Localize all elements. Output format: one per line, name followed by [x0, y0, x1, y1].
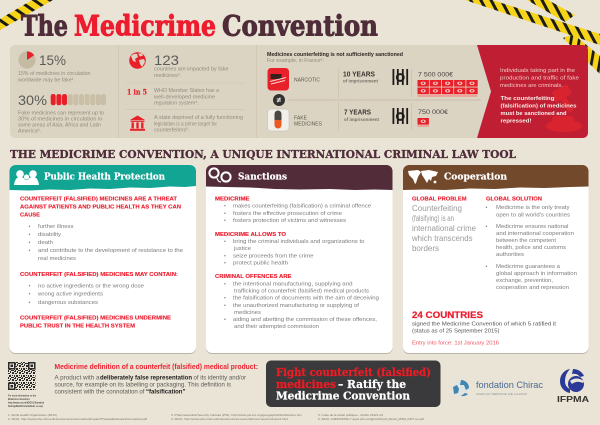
text: threats: AGAINST PATIENTS AND PUBLIC HEALTH AS THEY CAN: [20, 204, 181, 210]
stat: 123 countries: 123: [154, 52, 179, 68]
text: 24 countries: [412, 310, 557, 346]
text: public trust: PUBLIC TRUST IN THE HEALTH SYSTEM: [20, 324, 135, 330]
icon: fake medicine capsule: [268, 109, 289, 131]
text: medicrime: fosters protection of victims and witnesses: [233, 218, 346, 224]
stat: 123 countries: medicines³.: [154, 73, 181, 79]
panel: criminals call-out: production and traffic of fake: [500, 76, 579, 82]
sanctions comparison: FAKE: [294, 116, 308, 122]
title: [21, 10, 378, 42]
icon: family: [14, 170, 39, 185]
text: public trust: COUNTERFEIT (FALSIFIED) MEDICINES UNDERMINE: [20, 316, 171, 322]
text: 24 countries: 24 COUNTRIES: [412, 310, 483, 320]
text: criminal offences: •: [224, 296, 226, 302]
icon: caution tape top left: [0, 0, 53, 30]
panel: sanctions: [206, 165, 392, 354]
panel: public health protection: [10, 165, 196, 354]
icon: gavel watermark: [546, 84, 582, 132]
stat: state deprived: legislation is a prime target for: [154, 122, 217, 128]
sanctions comparison: Medicines counterfeiting is not sufficiently sanctioned: [267, 52, 403, 58]
fake medicine sentence: [344, 108, 380, 122]
stat: 1 in 5: WHO Member States has a: [154, 88, 219, 94]
text: threats: and contribute to the development of resistance to the: [38, 248, 183, 254]
call to action box: [266, 360, 440, 407]
panel: criminals call-out: [477, 45, 588, 138]
narcotic fine: 7 500 000€: [418, 72, 453, 78]
stat: 30 percent: [18, 92, 106, 134]
text: criminal offences: aiding and abetting the commission of these offences,: [233, 317, 378, 323]
text: medicrime allows to: •: [224, 254, 226, 260]
text: global problem: (falsifying) is an: [412, 214, 454, 223]
text: global solution: and international cooperation: [496, 231, 574, 237]
stat: 15 percent: 15% of medicines in circulation: [18, 71, 91, 77]
stat: 1 in 5: well-developed medicine: [154, 94, 215, 100]
text: medicrime allows to: bring the criminal individuals and organizations to: [233, 239, 364, 245]
text: 24 countries: (status as of 25 September 2015): [412, 328, 500, 334]
header: sanctions: [206, 165, 392, 190]
stat: 15 percent: 15%: [39, 52, 66, 68]
text: global solution: Medicrime ensures national: [496, 224, 568, 230]
text: criminal offences: •: [224, 317, 226, 323]
text: 24 countries: Entry into force: 1st January 2016: [412, 340, 499, 346]
text: contents: •: [28, 284, 30, 290]
text: threats: real medicines: [38, 256, 76, 262]
text: medicrime allows to: protect public health: [233, 260, 288, 266]
stat: 30 percent: some areas of Asia, Africa and Latin: [18, 122, 101, 128]
text: global solution: Medicrime is the only treaty: [496, 205, 570, 211]
narcotic sentence: of imprisonment: [343, 78, 379, 84]
fake medicine fine: [418, 109, 448, 127]
text: global solution: •: [486, 264, 488, 270]
panel: criminals call-out: (falsification) of medicines: [500, 104, 576, 110]
text: global solution: Medicrime guarantees a: [496, 264, 560, 270]
panel: cooperation: [403, 165, 588, 354]
text: definition: “falsification”: [146, 390, 186, 396]
text: contents: [20, 272, 178, 306]
text: medicrime: •: [224, 204, 226, 210]
text: criminal offences: the unauthorized manufacturing or supplying of: [233, 303, 360, 309]
text: definition: deliberately false representation: [100, 376, 192, 382]
header: cooperation: [403, 165, 588, 190]
text: medicrime: •: [224, 218, 226, 224]
text: global solution: global approach in information: [496, 271, 577, 277]
stat: 15 percent: worldwide may be fake¹.: [18, 78, 75, 84]
text: medicrime allows to: •: [224, 239, 226, 245]
panel: key figures: [10, 45, 588, 138]
text: global solution: exchange, prevention,: [496, 278, 554, 284]
header: cooperation: Cooperation: [444, 172, 507, 182]
narcotic sentence: 10 YEARS: [343, 70, 375, 78]
text: threats: •: [28, 248, 30, 254]
sanctions comparison: [267, 52, 481, 131]
stat: 30 percent: 30% of medicines in circulation in: [18, 116, 103, 122]
text: QR caption: For more information on the: [8, 394, 36, 398]
text: global problem: [411, 196, 476, 253]
sanctions comparison: For example, in France⁶:: [267, 58, 324, 64]
text: global solution: GLOBAL SOLUTION: [486, 196, 542, 202]
text: contents: dangerous substances: [38, 300, 98, 306]
footnotes: 3. Pharmaceutical Security Institute (PSI): http://www.psi-inc.org/geographicDistributions.cfm: [171, 413, 303, 417]
stat: 15 percent: [18, 51, 91, 84]
icon: caution tape top right: [465, 0, 600, 74]
logo: IFPMA: [557, 369, 589, 404]
text: global solution: authorities: [496, 252, 524, 258]
text: QR caption: [8, 394, 44, 408]
text: contents: •: [28, 292, 30, 298]
text: criminal offences: CRIMINAL OFFENCES ARE: [215, 274, 292, 280]
icon: pie chart: [18, 51, 36, 69]
icon: narcotic: [268, 68, 289, 90]
icon: QR code: [8, 362, 36, 390]
icon: prison bars narcotic: [392, 69, 408, 85]
stat: state deprived: counterfeiters⁵.: [154, 128, 190, 134]
text: contents: •: [28, 300, 30, 306]
icon: handcuffs: [209, 168, 231, 182]
text: criminal offences: [215, 274, 379, 330]
stat: 1 in 5: regulation system⁴.: [154, 100, 199, 106]
text: criminal offences: trafficking of counterfeit (falsified) medical products: [234, 288, 369, 294]
text: contents: COUNTERFEIT (FALSIFIED) MEDICINES MAY CONTAIN:: [20, 272, 178, 278]
icon: world map: [408, 170, 438, 184]
text: medicrime: •: [224, 211, 226, 217]
text: global solution: open to all world's countries: [496, 212, 570, 218]
text: criminal offences: •: [224, 282, 226, 288]
title: Medicrime: [74, 10, 216, 42]
text: global problem: which transcends: [411, 234, 473, 243]
text: global problem: borders: [412, 244, 439, 253]
text: threats: CAUSE: [20, 212, 40, 218]
icon: institution building: [130, 116, 145, 131]
text: contents: no active ingredients or the wrong dose: [38, 284, 144, 290]
text: global problem: GLOBAL PROBLEM: [412, 196, 467, 202]
text: QR caption: http://www.coe.int/t/DGHL/Standard: [8, 400, 44, 404]
title: The: [21, 10, 68, 42]
panel: criminals call-out: The counterfeiting: [500, 96, 555, 102]
text: global solution: [486, 196, 577, 291]
text: medicrime allows to: seize proceeds from the crime: [233, 254, 314, 260]
stat: 1 in 5: 1 in 5: [127, 88, 147, 96]
icon: prison bars fake medicine: [392, 108, 408, 124]
text: criminal offences: and their attempted commission: [234, 324, 319, 330]
icon: pill row: [51, 94, 106, 105]
panel: criminals call-out: Individuals taking part in the: [500, 68, 575, 74]
logo: fondation Chirac: [453, 380, 544, 396]
text: definition: source, for example on its labelling or packaging. This definition is: [54, 382, 231, 388]
sanctions comparison: NARCOTIC: [294, 78, 320, 84]
footnotes: 2. WHO, http://www.who.int/medicines/services/counterfeit/impact/TheNewEstimatesCounterfeit.pdf: [8, 417, 147, 421]
text: global solution: •: [486, 224, 488, 230]
stat: 1 in 5: [127, 88, 219, 106]
text: medicrime: MEDICRIME: [215, 196, 250, 202]
text: 24 countries: signed the Medicrime Convention of which 5 ratified it: [412, 322, 557, 328]
stat: 123 countries: [129, 52, 229, 79]
text: threats: disability: [38, 232, 61, 238]
footnotes: [8, 413, 424, 421]
text: QR caption: Setting/MediCrime/default_en.asp: [8, 404, 43, 408]
fake medicine sentence: of imprisonment: [344, 117, 380, 122]
call to action box: medicines: [276, 378, 336, 391]
text: criminal offences: •: [224, 303, 226, 309]
text: global solution: •: [486, 205, 488, 211]
text: criminal offences: the falsification of documents with the aim of deceiving: [233, 296, 379, 302]
icon: not equal sign: ≠: [277, 96, 282, 105]
title: Convention: [222, 10, 378, 42]
text: medicrime allows to: MEDICRIME ALLOWS TO: [215, 232, 287, 238]
text: threats: •: [28, 232, 30, 238]
text: global problem: Counterfeiting: [412, 204, 462, 213]
text: threats: •: [28, 240, 30, 246]
text: definition: [54, 364, 258, 396]
text: definition: consistent with the connotation of: [54, 390, 145, 396]
text: medicrime: fosters the effective prosecution of crime: [233, 211, 342, 217]
panel: criminals call-out: repressed!: [500, 118, 532, 124]
text: global solution: health, police and customs: [496, 245, 566, 251]
text: threats: COUNTERFEIT (FALSIFIED) MEDICINES ARE A THREAT: [20, 196, 178, 202]
text: public trust: [20, 316, 171, 330]
text: definition: Medicrime definition of a counterfeit (falsified) medical product:: [54, 364, 258, 371]
stat: 30 percent: 30%: [18, 92, 47, 108]
text: definition: of its identity and/or: [194, 376, 246, 382]
footnotes: 5. Code de la santé publique - Article L5421-13: [318, 413, 383, 417]
text: global problem: international crime: [412, 224, 476, 233]
icon: red globe: [129, 52, 146, 69]
call to action box: – Ratify the: [338, 378, 406, 391]
narcotic sentence: [343, 70, 379, 84]
stat: 123 countries: countries are impacted by fake: [154, 66, 229, 72]
stat: state deprived: [130, 115, 243, 134]
sanctions comparison: MEDICINES: [294, 122, 323, 128]
text: criminal offences: medicines: [234, 310, 261, 316]
text: medicrime: makes counterfeiting (falsification) a criminal offence: [233, 204, 371, 210]
call to action box: Fight counterfeit (falsified): [276, 366, 431, 379]
fake medicine sentence: 7 YEARS: [344, 108, 371, 116]
call to action box: Medicrime Convention: [276, 390, 410, 402]
icon: not equal sign: [273, 94, 285, 106]
text: global solution: between the competent: [496, 238, 557, 244]
panel: criminals call-out: medicines are criminals.: [500, 83, 563, 89]
text: medicrime allows to: [215, 232, 364, 266]
logo: fondation Chirac: AGIR AU SERVICE DE LA PAIX: [476, 392, 527, 396]
text: contents: wrong active ingredients: [37, 292, 103, 298]
text: medicrime allows to: •: [224, 260, 226, 266]
stat: 30 percent: Fake medicines can represent up to: [18, 110, 104, 116]
footnotes: 4. WHO, http://www.who.int/medicines/services/counterfeit/overview/en/index3.html: [171, 417, 288, 421]
logo: fondation Chirac: fondation Chirac: [476, 380, 544, 390]
text: definition: A product with a: [54, 376, 100, 382]
text: QR caption: Medicrime Convention:: [8, 397, 30, 401]
header: sanctions: Sanctions: [238, 172, 287, 182]
fake medicine fine: 750 000€: [418, 109, 448, 116]
narcotic fine: [418, 72, 478, 97]
text: threats: further illness: [38, 224, 74, 230]
footnotes: 1. World Health Organization (WHO): [8, 413, 57, 417]
text: criminal offences: the intentional manufacturing, supplying and: [233, 282, 352, 288]
text: threats: •: [28, 224, 30, 230]
text: threats: [20, 196, 183, 262]
stat: state deprived: A state deprived of a fully functioning: [154, 115, 243, 121]
panel: criminals call-out: must be sanctioned and: [500, 111, 567, 117]
logo: IFPMA: IFPMA: [557, 395, 589, 404]
section heading: THE MEDICRIME CONVENTION, A UNIQUE INTERNATIONAL CRIMINAL LAW TOOL: [10, 147, 516, 161]
text: global solution: cooperation and repression: [496, 285, 569, 291]
header: public health protection: [10, 165, 196, 190]
footnotes: 6. WHO, A/MSM/1/INF.7 apps.who.int/gb/ssffc/pdf_files/A_MSM_INF7-en.pdf: [318, 417, 424, 421]
stat: 30 percent: America².: [18, 128, 41, 134]
text: medicrime allows to: justice: [233, 246, 251, 252]
header: public health protection: Public Health Protection: [44, 172, 165, 182]
text: threats: death: [38, 240, 53, 246]
text: medicrime: [215, 196, 371, 224]
